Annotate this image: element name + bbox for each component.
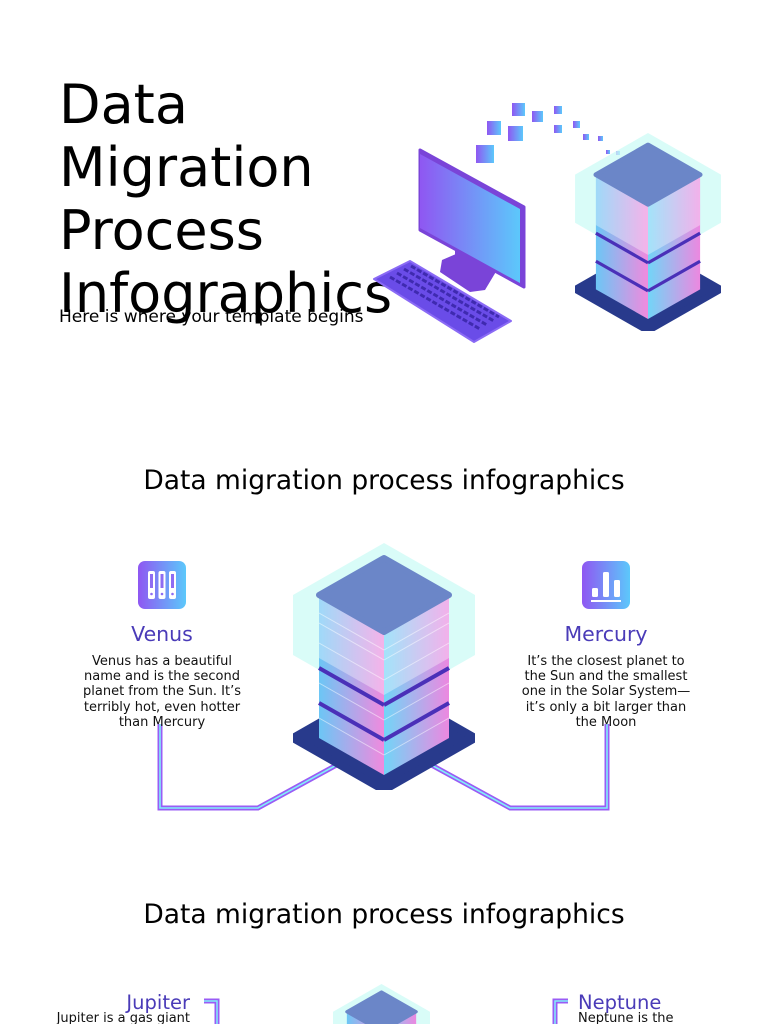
title: Process xyxy=(59,199,264,262)
icon: binders xyxy=(138,561,186,609)
heading: section 2: Data migration process infographics xyxy=(143,899,625,930)
icon: computer with data squares xyxy=(373,103,620,343)
panel: Neptune xyxy=(552,992,674,1024)
monitor xyxy=(420,150,524,287)
title xyxy=(59,73,392,325)
bracket xyxy=(552,998,568,1024)
title: Migration xyxy=(59,136,314,199)
icon: bottom server xyxy=(333,984,430,1024)
name: Venus xyxy=(131,622,193,646)
description: Venus has a beautiful name and is the second planet from the Sun. It’s terribly hot, even hotter than Mercury xyxy=(83,654,241,730)
panel: Jupiter xyxy=(56,992,220,1024)
subtitle: Here is where your template begins xyxy=(59,307,364,327)
icon: middle server xyxy=(293,543,475,790)
name: Mercury xyxy=(564,622,648,646)
keyboard xyxy=(374,261,511,342)
heading: section 1: Data migration process infographics xyxy=(143,465,625,496)
title: Data xyxy=(59,73,188,136)
bracket xyxy=(204,998,220,1024)
icon: bar chart xyxy=(582,561,630,609)
title: Infographics xyxy=(59,262,392,325)
connector lines xyxy=(158,724,610,810)
panel: Mercury xyxy=(522,561,690,730)
data squares xyxy=(476,103,620,163)
description: It’s the closest planet to the Sun and the smallest one in the Solar System—it’s only a bit larger than the Moon xyxy=(522,654,690,730)
icon: top server xyxy=(575,133,721,331)
stand xyxy=(455,245,478,282)
panel: Venus xyxy=(83,561,241,730)
